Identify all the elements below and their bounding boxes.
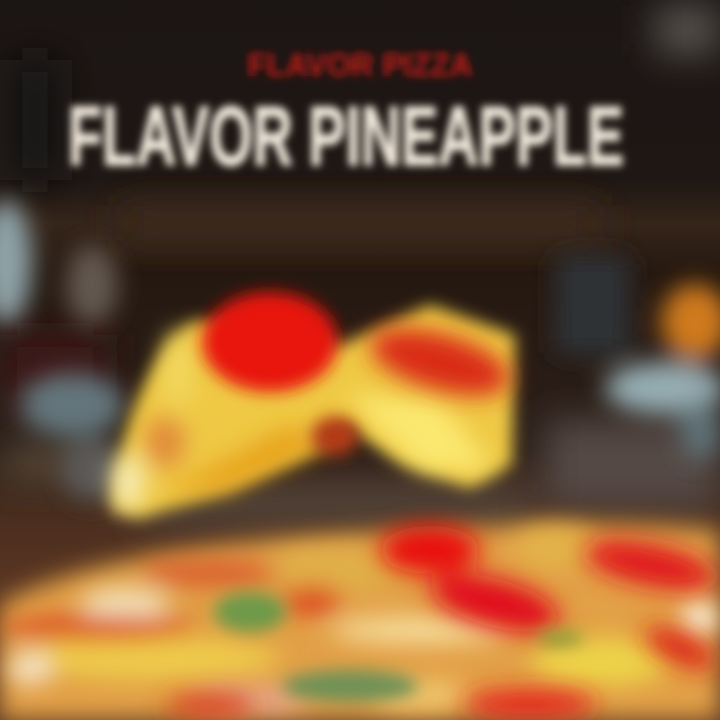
tomato topping, left slice bbox=[202, 292, 338, 392]
sauce spot bbox=[311, 416, 359, 456]
subtitle, red: FLAVOR PIZZA bbox=[248, 47, 472, 83]
tomato topping, right slice bbox=[363, 315, 517, 409]
foreground pizza bbox=[0, 524, 720, 720]
background shapes: wall, glasses, bowls bbox=[0, 5, 720, 525]
pizza slice bbox=[112, 292, 517, 518]
title text bbox=[68, 47, 624, 183]
